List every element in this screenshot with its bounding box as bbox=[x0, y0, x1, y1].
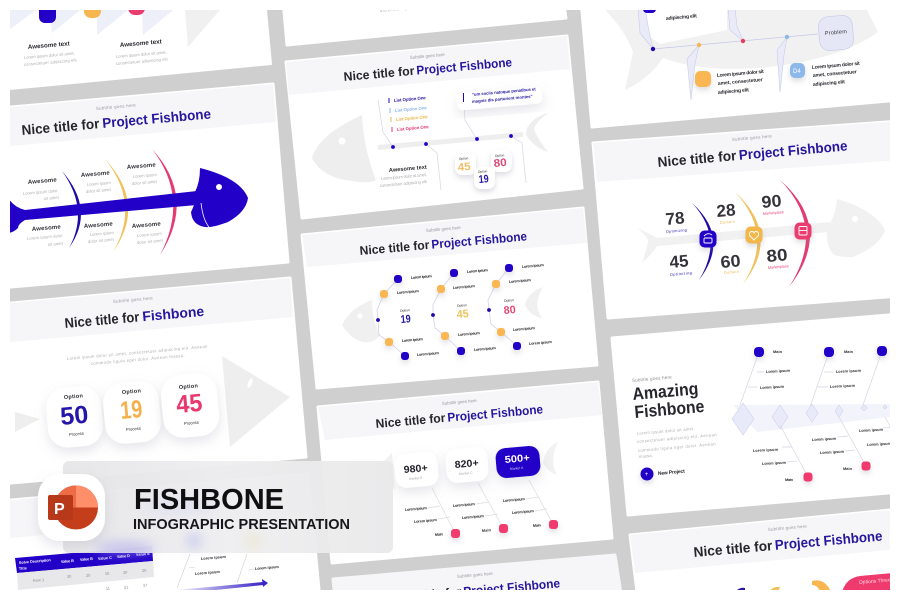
ghost fish bbox=[637, 199, 885, 263]
option card 19: Option bbox=[122, 388, 142, 396]
fish silhouette bbox=[15, 356, 290, 447]
node labels: Lorem ipsum bbox=[453, 284, 476, 290]
market card 820+ bbox=[445, 446, 489, 484]
fish arcs bbox=[62, 149, 177, 255]
panel: top-right slide with problem fish bbox=[581, 0, 900, 127]
option card 50: Process bbox=[69, 431, 84, 437]
option card 45: 45 bbox=[175, 389, 204, 419]
option card 45: Process bbox=[184, 420, 199, 426]
new project button bbox=[640, 468, 685, 480]
value labels: 60 bbox=[720, 251, 741, 272]
new project button: + bbox=[645, 472, 649, 478]
icon: heart bbox=[746, 226, 762, 244]
panel: list and quote slide bbox=[286, 36, 582, 218]
table: 20 bbox=[142, 568, 147, 573]
option mini cards bbox=[455, 150, 512, 189]
table: Title bbox=[19, 566, 27, 571]
icon: PowerPoint app badge bbox=[38, 474, 105, 541]
D4 icon: D4 bbox=[793, 69, 801, 75]
node dots bbox=[376, 308, 491, 322]
table: 30 bbox=[123, 570, 128, 575]
panel: option cards slide: Subtitle goes here bbox=[113, 295, 153, 304]
fish labels: dolor sit amet bbox=[88, 237, 115, 244]
bone labels: Main bbox=[785, 478, 794, 482]
orange icon bbox=[695, 71, 711, 87]
value labels: Marketplace bbox=[763, 210, 784, 216]
heading: Project Fishbone bbox=[447, 402, 544, 425]
table: Value C bbox=[98, 556, 112, 561]
quote card bbox=[456, 86, 543, 111]
heading bbox=[65, 308, 204, 328]
center values: Option bbox=[400, 308, 410, 313]
awesome text block: Lorem ipsum dolor sit amet, bbox=[381, 172, 427, 181]
bone labels: Main bbox=[843, 467, 853, 471]
option mini cards: 80 bbox=[493, 157, 507, 170]
bone labels: Lorem ipsum bbox=[453, 502, 476, 508]
bone labels: Lorem ipsum bbox=[762, 461, 787, 466]
heading: Project Fishbone bbox=[416, 55, 513, 78]
value labels: Optimizing bbox=[666, 228, 687, 234]
fish labels: Lorem ipsum bbox=[133, 172, 157, 179]
main title: FISHBONE bbox=[134, 484, 284, 516]
description: Lorem ipsum dolor sit amet, bbox=[637, 426, 695, 436]
option card 50 bbox=[44, 385, 105, 449]
table: 20 bbox=[86, 573, 91, 578]
fish labels: Lorem ipsum bbox=[90, 230, 114, 237]
connectors bbox=[377, 268, 517, 356]
bone labels: Main bbox=[773, 350, 783, 354]
panel: solid fish diagram slide: Subtitle goes here bbox=[96, 102, 136, 111]
heading: Project Fishbone bbox=[463, 576, 561, 599]
list options: List Option One bbox=[397, 124, 430, 132]
bone labels: Lorem ipsum bbox=[859, 428, 884, 433]
panel: solid fish diagram slide bbox=[0, 84, 288, 288]
heading: Nice title for bbox=[64, 308, 140, 331]
quote card: magnis dis parturient montes” bbox=[472, 94, 533, 104]
diamonds bbox=[732, 403, 887, 435]
arc tops bbox=[737, 580, 830, 592]
icon: PowerPoint app badge: P bbox=[54, 501, 65, 518]
table: Value D bbox=[117, 554, 130, 559]
ghost fish bbox=[342, 287, 543, 342]
table: 11 bbox=[106, 586, 111, 591]
ghost fish bbox=[600, 0, 878, 90]
heading: Nice title for bbox=[343, 64, 415, 84]
table: Row 1 bbox=[33, 577, 45, 583]
panel: table and arrow slide: Lorem ipsum bbox=[195, 570, 221, 576]
panel: bottom-center slide fragment: Subtitle goes here bbox=[457, 571, 493, 579]
bone texts: Lorem ipsum dolor sit bbox=[717, 69, 764, 79]
node labels bbox=[397, 263, 553, 357]
panel: table and arrow slide: Lorem ipsum bbox=[255, 565, 280, 571]
description: massa. bbox=[639, 453, 653, 459]
center values: Option bbox=[504, 298, 514, 303]
bone texts bbox=[666, 13, 860, 96]
subtitle: INFOGRAPHIC PRESENTATION bbox=[133, 516, 350, 533]
description bbox=[637, 426, 717, 459]
heading: Project Fishbone bbox=[738, 137, 848, 163]
panel: top-center slide fragment bbox=[282, 10, 568, 46]
orange nodes bbox=[380, 280, 505, 346]
bone texts: adipiscing elit bbox=[718, 87, 749, 96]
bone labels: Lorem ipsum bbox=[812, 437, 837, 442]
bone labels: Lorem ipsum bbox=[462, 514, 485, 520]
bone labels: Main bbox=[435, 532, 444, 537]
market card 980+: 980+ bbox=[403, 463, 428, 476]
value labels: 90 bbox=[761, 191, 782, 212]
fish labels: Awesome bbox=[28, 177, 58, 186]
option mini cards: 19 bbox=[478, 173, 489, 186]
list options: List Option One bbox=[395, 105, 428, 113]
arrow bbox=[180, 579, 268, 590]
bone labels: Lorem ipsum bbox=[753, 448, 779, 453]
center values bbox=[400, 299, 516, 323]
table: Value B bbox=[80, 557, 93, 562]
heading bbox=[360, 234, 527, 255]
bone labels: Lorem ipsum bbox=[760, 385, 785, 390]
heading: Project Fishbone bbox=[102, 105, 212, 131]
table: 21 bbox=[124, 585, 129, 590]
option card 50: Option bbox=[64, 393, 84, 401]
fish labels: dolor sit amet bbox=[86, 187, 112, 194]
panel: top-left slide fragment: Awesome text bbox=[28, 40, 70, 51]
panel: option cards slide: Lorem ipsum dolor sit amet, consectetuer adipiscing elit. Aenean bbox=[67, 344, 208, 361]
dark nodes bbox=[394, 264, 521, 360]
table: 37 bbox=[143, 583, 148, 588]
heading: Project Fishbone bbox=[431, 229, 528, 252]
option card 19: 19 bbox=[119, 395, 143, 425]
value labels: Optimizing bbox=[670, 271, 692, 277]
panel: table and arrow slide bbox=[10, 496, 320, 590]
node labels: Lorem ipsum bbox=[397, 289, 420, 295]
option mini cards: 45 bbox=[457, 161, 471, 174]
node labels: Lorem ipsum bbox=[458, 331, 481, 337]
bone labels: Lorem ipsum bbox=[405, 506, 428, 512]
node labels: Lorem ipsum bbox=[402, 337, 424, 343]
bone labels: Lorem ipsum bbox=[512, 509, 535, 515]
pink nodes bbox=[451, 520, 558, 538]
fish labels: Awesome bbox=[127, 162, 157, 171]
panel: top-left slide fragment: consectetuer adipiscing elit bbox=[116, 56, 169, 66]
value labels: 45 bbox=[669, 251, 689, 272]
lilac bones bbox=[638, 8, 787, 100]
panel: top-left slide fragment: consectetuer adipiscing elit bbox=[24, 57, 78, 67]
bone labels: Lorem ipsum bbox=[820, 450, 845, 455]
value labels: 78 bbox=[665, 208, 685, 229]
ghost fish bbox=[312, 113, 550, 182]
fish labels: sit amet bbox=[48, 241, 64, 247]
bone labels: Lorem ipsum bbox=[830, 384, 856, 389]
panel: bottom-center slide fragment bbox=[333, 555, 622, 600]
bone labels: Lorem ipsum bbox=[414, 518, 438, 524]
spine dots bbox=[651, 35, 789, 51]
bone labels: Lorem ipsum bbox=[503, 497, 526, 503]
option card 45 bbox=[159, 372, 221, 439]
bone texts: adipiscing elit bbox=[666, 13, 697, 22]
spine wedge bbox=[733, 404, 890, 432]
pill: options three bbox=[842, 573, 892, 592]
option mini cards: Option bbox=[459, 156, 469, 161]
fish labels: dolor sit amet bbox=[137, 238, 164, 245]
node labels: Lorem ipsum bbox=[417, 351, 440, 357]
market card 980+: Market B bbox=[409, 476, 423, 481]
new project button: New Project bbox=[658, 469, 685, 477]
panel: bottom-right slide fragment bbox=[630, 509, 900, 600]
value labels: 80 bbox=[766, 245, 788, 266]
option card 19 bbox=[101, 380, 163, 445]
fish labels: Awesome bbox=[81, 170, 111, 179]
bone labels: Main bbox=[482, 528, 492, 533]
bone labels: Lorem ipsum bbox=[836, 369, 862, 374]
list options: List Option One bbox=[396, 114, 429, 122]
bone texts: adipiscing elit bbox=[813, 79, 845, 88]
panel: market cards slide: Subtitle goes here bbox=[442, 398, 477, 406]
awesome text block bbox=[380, 165, 428, 188]
node labels: Lorem ipsum bbox=[513, 326, 536, 332]
panel: list and quote slide: Subtitle goes here bbox=[410, 52, 445, 60]
table: Value E bbox=[136, 552, 150, 557]
panel: option cards slide: commodo ligula eget dolor. Aenean massa. bbox=[91, 353, 185, 366]
icon: wifi box bbox=[700, 230, 716, 248]
market card 500+ bbox=[495, 445, 541, 479]
list options bbox=[388, 95, 430, 132]
option card 19: Process bbox=[126, 426, 141, 432]
panel: amazing fishbone slide: Subtitle goes here bbox=[632, 374, 672, 383]
arcs bbox=[692, 180, 810, 287]
bone texts: Lorem ipsum dolor sit bbox=[812, 61, 860, 71]
heading: Nice title for bbox=[359, 238, 430, 258]
description: commodo ligula eget dolor. Aenean bbox=[638, 441, 716, 453]
heading: Project Fishbone bbox=[774, 528, 883, 553]
panel: node clusters slide bbox=[302, 208, 597, 388]
blue nodes bbox=[754, 346, 887, 357]
panel: top-left slide fragment: Lorem ipsum dolor sit amet, bbox=[24, 51, 75, 60]
pink nodes bbox=[804, 462, 870, 482]
panel: bottom-right slide fragment: Subtitle goes here bbox=[768, 524, 807, 532]
heading bbox=[376, 406, 543, 428]
market card 820+: Market C bbox=[459, 471, 473, 476]
panel: top-left slide fragment: Lorem ipsum dolor sit amet, bbox=[116, 50, 167, 59]
bone labels: Main bbox=[533, 523, 542, 528]
bone labels: Lorem ipsum bbox=[867, 442, 892, 447]
fish labels: Awesome bbox=[84, 221, 114, 230]
node labels: Lorem ipsum bbox=[529, 340, 553, 346]
heading bbox=[632, 378, 705, 422]
node labels: Lorem ipsum bbox=[522, 263, 545, 269]
panel: numbers fish slide bbox=[593, 121, 900, 318]
table: Solve Description bbox=[19, 558, 52, 565]
fish labels bbox=[23, 162, 164, 247]
value labels bbox=[665, 191, 789, 277]
list options: List Option One bbox=[394, 95, 427, 103]
center values: Option bbox=[457, 303, 467, 308]
option mini cards: Option bbox=[495, 153, 505, 158]
panel: top-left slide fragment bbox=[10, 10, 272, 90]
table: 16 bbox=[105, 571, 110, 576]
bone labels: Main bbox=[844, 350, 854, 354]
heading: Fishbone bbox=[634, 396, 705, 422]
icon: floppy bbox=[794, 222, 812, 240]
bone labels bbox=[405, 497, 542, 537]
panel: node clusters slide: Subtitle goes here bbox=[426, 225, 461, 233]
heading: Amazing bbox=[632, 378, 699, 404]
center values: 19 bbox=[400, 313, 411, 326]
value labels: Domain bbox=[720, 220, 735, 225]
panel: table and arrow slide: Lorem ipsum bbox=[201, 555, 227, 561]
fish labels: Lorem ipsum dolor bbox=[27, 233, 64, 241]
bone texts: amet, consectetuer bbox=[718, 77, 763, 87]
panel: amazing fishbone slide bbox=[612, 314, 900, 515]
fish labels: Awesome bbox=[32, 224, 62, 233]
heading: Nice title for bbox=[375, 411, 446, 431]
option card 45: Option bbox=[179, 383, 199, 391]
node labels: Lorem ipsum bbox=[467, 268, 489, 274]
pill: options three: Options Three bbox=[859, 577, 891, 586]
option mini cards: Option bbox=[478, 169, 488, 174]
node labels: Lorem ipsum bbox=[411, 274, 433, 280]
bones bbox=[428, 480, 553, 533]
bones bbox=[740, 351, 892, 477]
bone texts: amet, consectetuer bbox=[813, 69, 857, 79]
fish labels: Lorem ipsum bbox=[137, 231, 162, 238]
fish labels: Lorem ipsum bbox=[87, 180, 111, 187]
ghost tail bbox=[375, 442, 558, 490]
market card 500+: Market A bbox=[510, 466, 524, 471]
quote card: “um sociis natoque penatibus et bbox=[472, 86, 536, 97]
value labels: Marketplace bbox=[768, 264, 789, 270]
heading bbox=[22, 110, 211, 135]
D4 icon bbox=[790, 63, 805, 78]
market card 980+ bbox=[394, 451, 439, 489]
node labels: Lorem ipsum bbox=[509, 278, 532, 284]
heading: Fishbone bbox=[142, 303, 205, 324]
table: 30 bbox=[67, 574, 72, 579]
center values: 45 bbox=[456, 308, 469, 321]
fish labels: sit amet bbox=[44, 195, 60, 201]
fish labels: dolor sit amet bbox=[132, 179, 158, 186]
fish skeleton bbox=[9, 168, 248, 233]
bones bbox=[378, 100, 526, 190]
panel: numbers fish slide: Subtitle goes here bbox=[732, 133, 772, 142]
market card 500+: 500+ bbox=[504, 453, 530, 466]
value labels: 28 bbox=[716, 200, 736, 221]
option card 50: 50 bbox=[59, 401, 89, 431]
center values: 80 bbox=[503, 304, 516, 317]
problem box bbox=[818, 15, 854, 51]
heading: Nice title for bbox=[693, 537, 773, 560]
fish labels: Awesome bbox=[132, 221, 162, 230]
market card 820+: 820+ bbox=[454, 458, 479, 471]
heading: Nice title for bbox=[657, 147, 737, 170]
panel: option cards slide bbox=[0, 278, 306, 484]
description: consectetuer adipiscing elit. Aenean bbox=[637, 432, 717, 444]
awesome text block: Awesome text bbox=[389, 165, 427, 174]
heading bbox=[657, 137, 848, 170]
heading bbox=[391, 576, 561, 600]
problem box: Problem bbox=[825, 29, 847, 37]
table bbox=[15, 546, 154, 591]
node labels: Lorem ipsum bbox=[474, 346, 497, 352]
heading bbox=[344, 60, 512, 81]
panel: top-left slide fragment: Awesome text bbox=[120, 38, 162, 49]
panel: market cards slide bbox=[318, 382, 612, 563]
heading: Nice title for bbox=[21, 115, 100, 138]
top blue icon bbox=[643, 2, 656, 13]
spine bbox=[653, 34, 818, 49]
fishbone lines bbox=[177, 554, 254, 588]
title banner bbox=[63, 461, 393, 553]
value labels: Domain bbox=[724, 270, 739, 275]
fish labels: Lorem ipsum dolor bbox=[23, 188, 59, 196]
spine dots bbox=[391, 134, 513, 149]
bone labels: Lorem ipsum bbox=[766, 369, 791, 374]
heading bbox=[693, 528, 883, 560]
panel: top-center slide fragment: adipiscing elit bbox=[380, 5, 419, 13]
bone labels bbox=[753, 350, 892, 482]
table: Value B bbox=[61, 559, 74, 564]
awesome text block: consectetuer adipiscing elit bbox=[380, 179, 428, 188]
